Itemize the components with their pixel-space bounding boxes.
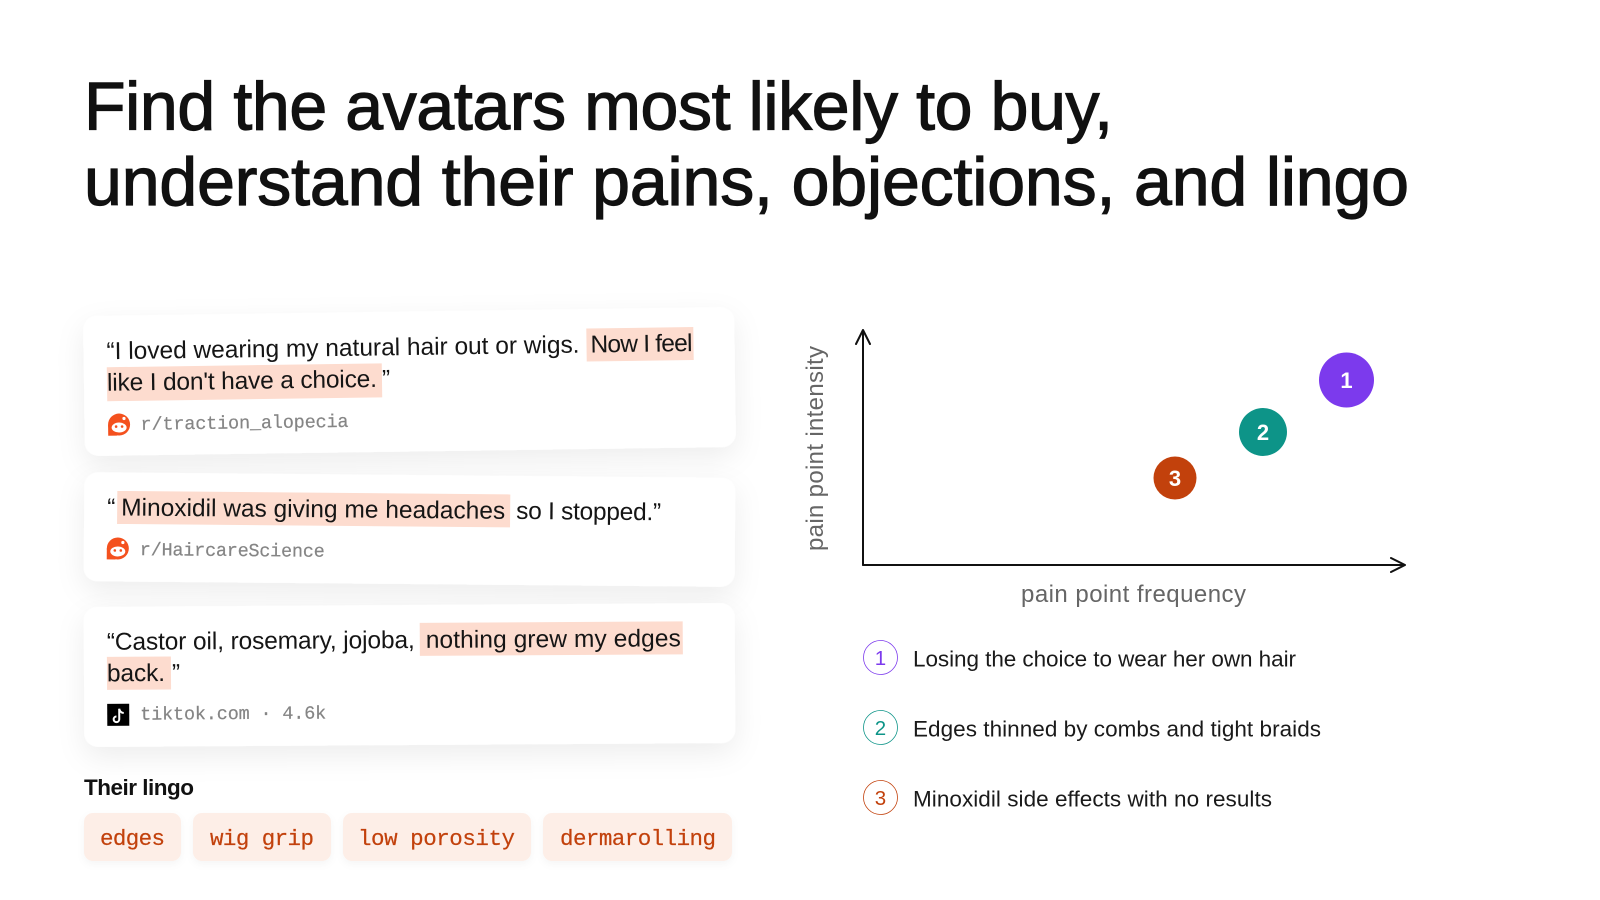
bubble 2: 2 [1257,420,1269,445]
quote text: “ [107,494,115,521]
title: Find the avatars most likely to buy, [84,68,1113,144]
quote text: “I loved wearing my natural hair out or wigs. [106,332,580,365]
chip: low porosity [343,813,531,861]
title [84,68,1409,220]
bubble 1: 1 [1340,368,1353,393]
highlight: back [107,656,171,690]
source label: tiktok.com · 4.6k [140,704,326,726]
quote text: ” [382,366,390,393]
chip: dermarolling: dermarolling [560,826,716,852]
icon: reddit [108,413,130,436]
source label: r/HaircareScience [140,540,325,563]
quote text [106,330,693,397]
legend item 3: 3 [875,787,886,810]
title: understand their pains, objections, and lingo [84,144,1409,220]
icon: tiktok [107,704,129,726]
chip: dermarolling [543,813,732,861]
quote text [107,494,661,526]
quote text: so I stopped.” [516,498,661,526]
chip: wig grip [193,813,331,861]
highlight: minoxidil [117,491,510,527]
quote text [107,625,681,687]
quote text: Minoxidil was giving me headaches [121,494,505,525]
legend item 1: 1 [875,647,886,670]
source label: r/traction_alopecia [140,412,349,436]
legend item 3 [864,780,1272,814]
quote text: nothing grew my edges [426,625,681,654]
quote text: like I don't have a choice. [107,366,377,397]
legend item 2: Edges thinned by combs and tight braids [913,716,1321,742]
chip: low porosity: low porosity [358,826,515,852]
legend item 1 [864,640,1296,674]
highlight: nothing grew my edges [420,621,683,656]
highlight: now I feel [586,327,694,362]
x axis arrow [863,558,1405,572]
y axis label: pain point intensity [802,346,829,551]
chip: edges: edges [100,826,165,852]
bubble 2 [1239,408,1287,456]
panel: quote card 2 [84,472,735,587]
chip: wig grip: wig grip [210,826,314,852]
quote text: ” [172,660,180,687]
highlight: like I don't have a choice [107,363,382,401]
chart: pain point matrix [802,330,1405,608]
x axis label: pain point frequency [1021,581,1246,608]
quote text: back. [107,660,165,687]
icon: reddit [107,537,129,560]
legend item 2: 2 [875,717,886,740]
panel: quote card 1 [83,307,736,456]
y axis arrow [856,330,870,565]
bubble 3: 3 [1169,466,1181,491]
bubble 1 [1319,352,1374,408]
chip: edges [84,813,181,861]
quote text: “Castor oil, rosemary, jojoba, [107,627,415,656]
quote text: Now I feel [590,330,693,358]
legend item 3: Minoxidil side effects with no results [913,786,1272,812]
heading: their lingo: Their lingo [84,775,194,800]
legend item 2 [864,710,1321,744]
bubble 3 [1154,456,1196,500]
legend item 1: Losing the choice to wear her own hair [913,646,1296,672]
panel: quote card 3 [84,603,735,747]
